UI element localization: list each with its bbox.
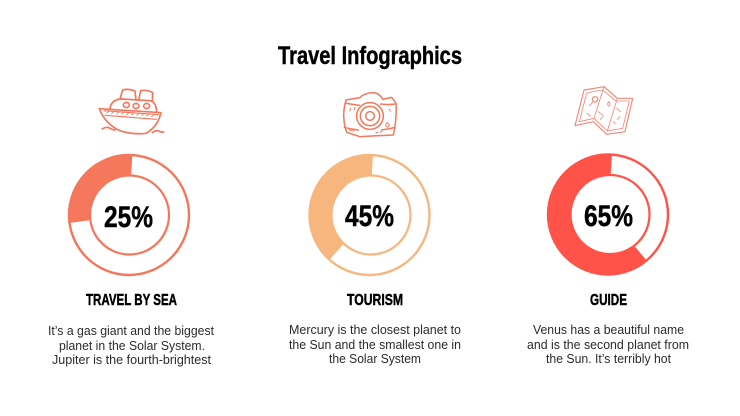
text block: jupiter	[48, 324, 215, 367]
heading: guide: GUIDE	[590, 292, 627, 309]
icon: map	[575, 87, 633, 134]
icon: ship	[99, 89, 164, 134]
donut chart: 25%	[69, 155, 189, 275]
donut chart: 65%: 65%	[584, 200, 633, 233]
text block: jupiter: Jupiter is the fourth-brightest	[52, 353, 212, 367]
panel: guide	[527, 87, 689, 366]
heading: tourism: TOURISM	[347, 292, 403, 309]
text block: mercury: the Solar System	[329, 352, 421, 366]
heading: travel by sea: TRAVEL BY SEA	[86, 292, 177, 309]
text block: venus	[527, 323, 689, 366]
donut chart: 45%	[309, 154, 430, 275]
donut chart: 65%	[547, 154, 668, 275]
text block: jupiter: It’s a gas giant and the biggest	[48, 324, 215, 338]
donut chart: 45%: 45%	[345, 200, 394, 233]
text block: mercury	[289, 323, 461, 366]
text block: venus: and is the second planet from	[527, 338, 689, 352]
title: Travel Infographics	[278, 42, 462, 70]
panel: travel by sea	[48, 89, 215, 367]
text block: venus: Venus has a beautiful name	[533, 323, 684, 337]
donut chart: 25%: 25%	[104, 201, 153, 234]
panel: tourism	[289, 93, 461, 366]
text block: mercury: Mercury is the closest planet to	[289, 323, 461, 337]
text block: venus: the Sun. It’s terribly hot	[546, 352, 672, 366]
text block: mercury: the Sun and the smallest one in	[289, 338, 461, 352]
icon: camera	[344, 93, 396, 137]
text block: jupiter: planet in the Solar System.	[59, 339, 205, 353]
